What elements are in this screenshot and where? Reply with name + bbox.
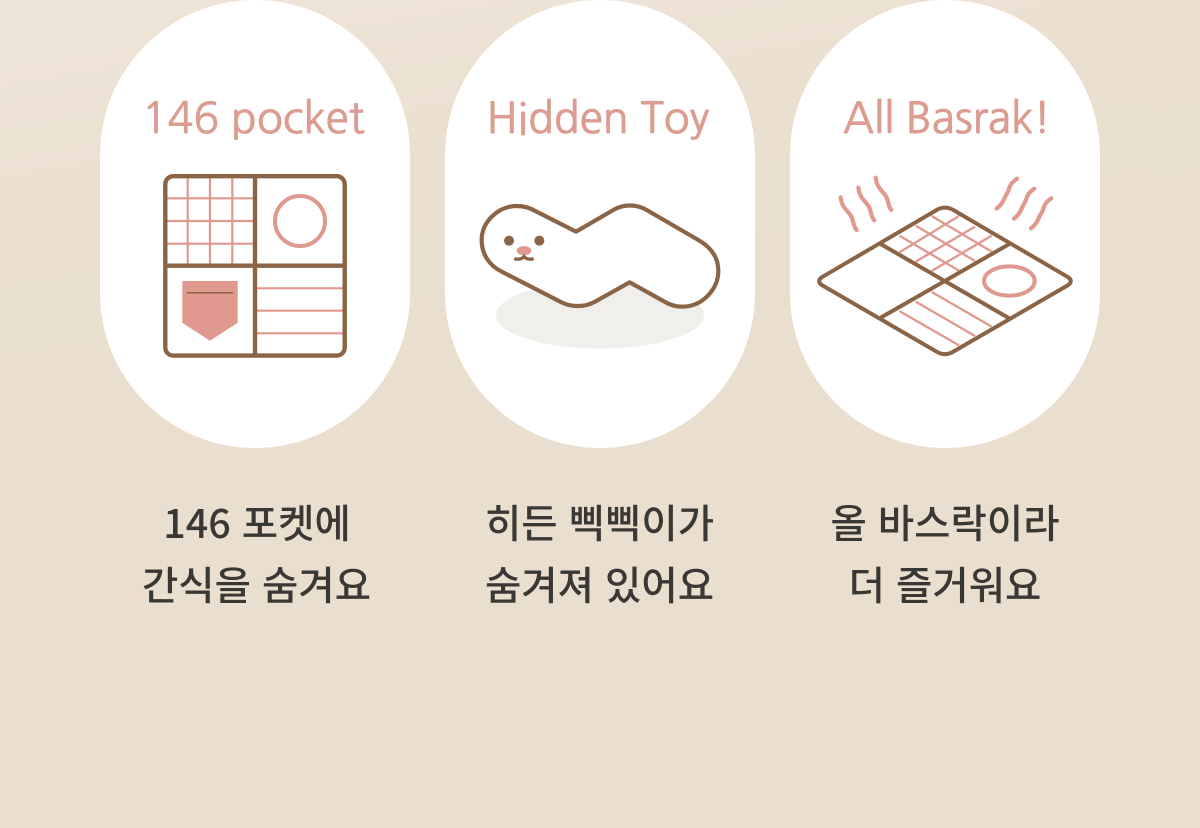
icon: isometric mat with steam [819,178,1071,354]
capsule background [100,0,410,448]
caption: Hidden Toy: 숨겨져 있어요 [485,555,714,612]
caption: Hidden Toy: 히든 삑삑이가 [485,493,714,550]
caption: All Basrak [830,493,1060,612]
panel: Hidden Toy [445,0,755,448]
panel: 146 pocket [100,0,410,448]
icon: hidden toy character [482,205,718,349]
caption: 146 pocket [142,493,371,612]
caption: 146 pocket: 간식을 숨겨요 [142,555,371,612]
heading: 146 pocket: 146 pocket [142,98,365,140]
capsule background [445,0,755,448]
caption: 146 pocket: 146 포켓에 [163,493,351,550]
caption: All Basrak: 올 바스락이라 [830,493,1060,550]
icon: quilted mat with pocket [165,176,345,356]
panel: All Basrak [790,0,1100,448]
heading: Hidden Toy: Hidden Toy [487,98,710,140]
caption: Hidden Toy [485,493,714,612]
heading: All Basrak!: All Basrak! [843,98,1051,140]
capsule background [790,0,1100,448]
caption: All Basrak: 더 즐거워요 [849,555,1041,612]
